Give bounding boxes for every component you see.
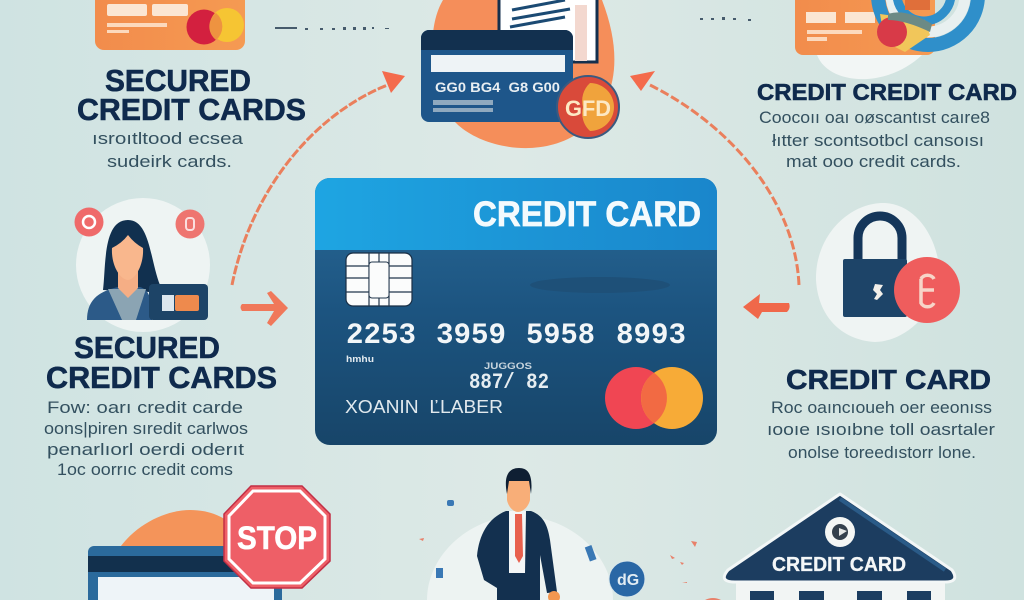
card number: 3959 xyxy=(436,319,506,353)
panel: bottom left stop xyxy=(88,486,330,600)
text block xyxy=(92,129,244,171)
icon: badge: GFD xyxy=(565,96,611,121)
panel: bottom right bank xyxy=(724,494,955,600)
icon: browser screen xyxy=(88,546,282,600)
heading xyxy=(77,63,306,127)
card number: 5958 xyxy=(526,319,595,353)
valid label: JUGGOS xyxy=(484,361,532,371)
text block: Coocoıı oaı oøscantıst caıre8 xyxy=(759,108,990,127)
heading: CREDIT CARD xyxy=(786,364,991,395)
top band xyxy=(315,178,717,293)
bank label: CREDIT CARD xyxy=(772,554,906,576)
card number: 8993 xyxy=(616,319,686,353)
text block xyxy=(44,398,248,479)
card number: 2253 xyxy=(346,319,416,353)
small label: hmhu xyxy=(346,354,374,364)
panel: right credit card xyxy=(767,203,995,462)
card number xyxy=(346,319,686,353)
card title: CREDIT CARD xyxy=(473,195,701,234)
icon: pink badge left xyxy=(74,208,104,236)
small confetti xyxy=(419,538,721,600)
orange blob xyxy=(432,0,614,148)
text block: oons|piren sıredit carlwos xyxy=(44,419,248,438)
heading: CREDIT CARDS xyxy=(46,360,277,395)
arrow: left curved dashed xyxy=(232,71,405,285)
roof xyxy=(724,494,955,582)
panel: bottom centre person xyxy=(419,468,721,600)
text block: ıooıe ısıoıbne toll oasrtaler xyxy=(767,420,995,439)
text block xyxy=(759,108,990,171)
icon: blue coin xyxy=(609,561,645,597)
icon: blue card back xyxy=(421,30,573,122)
icon: mastercard circles xyxy=(605,367,703,429)
columns xyxy=(736,583,945,600)
icon: small card xyxy=(149,284,208,320)
arrow: left small xyxy=(240,291,288,326)
arrow: right small xyxy=(743,294,790,319)
heading: CREDIT CREDIT CARD xyxy=(757,79,1017,105)
heading: CREDIT CARDS xyxy=(77,92,306,127)
chip xyxy=(346,253,412,306)
white circle xyxy=(816,203,940,342)
icon: pink badge right xyxy=(176,210,204,238)
heading: SECURED xyxy=(74,330,220,365)
text block: Roc oaıncıoueh oer eeonıss xyxy=(771,398,992,417)
icon: badge xyxy=(557,76,619,138)
text block: mat ooo credit cards. xyxy=(786,152,961,171)
arrow: right curved dashed xyxy=(630,71,799,285)
icon: businessman xyxy=(477,468,560,600)
orange semicircle xyxy=(118,510,240,550)
panel: top right credit card xyxy=(757,0,1017,171)
text block xyxy=(767,398,995,462)
icon: padlock xyxy=(843,216,907,317)
panel: top centre card xyxy=(421,0,619,148)
icon: stop sign xyxy=(224,486,330,588)
heading: SECURED xyxy=(105,63,251,98)
dotted marks top left xyxy=(275,27,389,30)
icon: white blob xyxy=(816,52,922,79)
icon: target ring xyxy=(877,0,978,52)
icon: stop sign: STOP xyxy=(237,520,317,556)
icon: red circle xyxy=(894,257,960,323)
text block: Fow: oarı credit carde xyxy=(47,398,243,417)
icon: woman xyxy=(87,220,160,320)
cardholder name: XOANIN ĽLABER xyxy=(345,397,503,417)
text block: ısroıtltood ecsea xyxy=(92,129,244,148)
text block: 1oc oorrıc credit coms xyxy=(57,460,233,479)
white circle xyxy=(76,198,210,332)
expiry: 887/ 82 xyxy=(469,370,549,395)
text block: łıtter scontsotbcl cansoısı xyxy=(772,131,984,150)
white circle xyxy=(427,516,613,600)
icon: blue card back: GG0 BG4 G8 G00 xyxy=(435,79,560,95)
panel: top left secured credit cards xyxy=(77,0,306,171)
text block: onolse toreedıstorr lone. xyxy=(788,443,976,462)
text block: sudeirk cards. xyxy=(107,152,232,171)
icon: small blue tokens xyxy=(436,500,596,578)
dotted marks top right xyxy=(700,17,751,21)
panel: left secured credit cards xyxy=(44,198,277,479)
icon: blue coin: dG xyxy=(617,572,639,589)
heading xyxy=(46,330,277,395)
icon: orange credit card xyxy=(95,0,245,50)
icon: orange credit card xyxy=(795,0,935,55)
panel: main credit card xyxy=(315,178,717,445)
text block: penarlıorl oerdi oderıt xyxy=(47,440,244,459)
icon: document xyxy=(499,0,597,62)
